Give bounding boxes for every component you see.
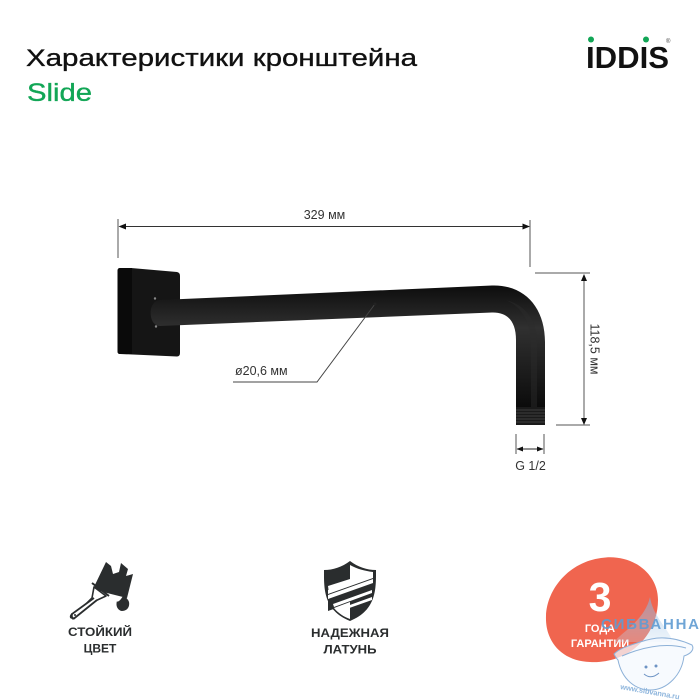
dimension: length 329 mm [118,208,530,267]
icon: paint drop [116,593,129,611]
feature: reliable brass [311,561,389,656]
dimension: thread G 1/2: G 1/2 [515,459,546,473]
dimension: length 329 mm: 329 мм [304,208,345,222]
feature: durable colour [68,562,133,656]
number 3: 3 [589,574,611,620]
label: СТОЙКИЙ [68,624,132,639]
title: Характеристики кронштейна [26,45,417,72]
dimension: thread G 1/2 [515,434,546,473]
shower arm product image [118,268,545,425]
feature: reliable brass: ЛАТУНЬ [324,642,377,656]
icon: paint brush [71,562,133,619]
warranty badge: ГАРАНТИИ [571,638,629,650]
dimension: height 118,5 mm [535,273,602,425]
dimension: diameter leader [233,302,376,382]
drop [614,597,672,642]
logo: IDDIS: IDDIS [586,40,669,75]
icon: shield [324,561,376,621]
dimension: height 118,5 mm: 118,5 мм [588,323,602,375]
arm tube [151,285,545,407]
bathtub [614,638,693,690]
feature: durable colour: ЦВЕТ [84,642,117,656]
warranty text: ГОДА [585,623,615,635]
watermark: Sibvanna [601,597,699,700]
badge blob [546,557,658,662]
wall plate [118,268,180,356]
warranty badge [546,557,658,662]
watermark name: СИБВАННА [601,616,699,633]
subtitle: model name: Slide [27,79,92,107]
dimension: diameter leader: ø20,6 мм [235,364,288,378]
logo: IDDIS: ® [666,38,671,45]
bathtub face [644,664,659,677]
label: НАДЕЖНАЯ [311,626,389,640]
threaded end [516,407,545,425]
